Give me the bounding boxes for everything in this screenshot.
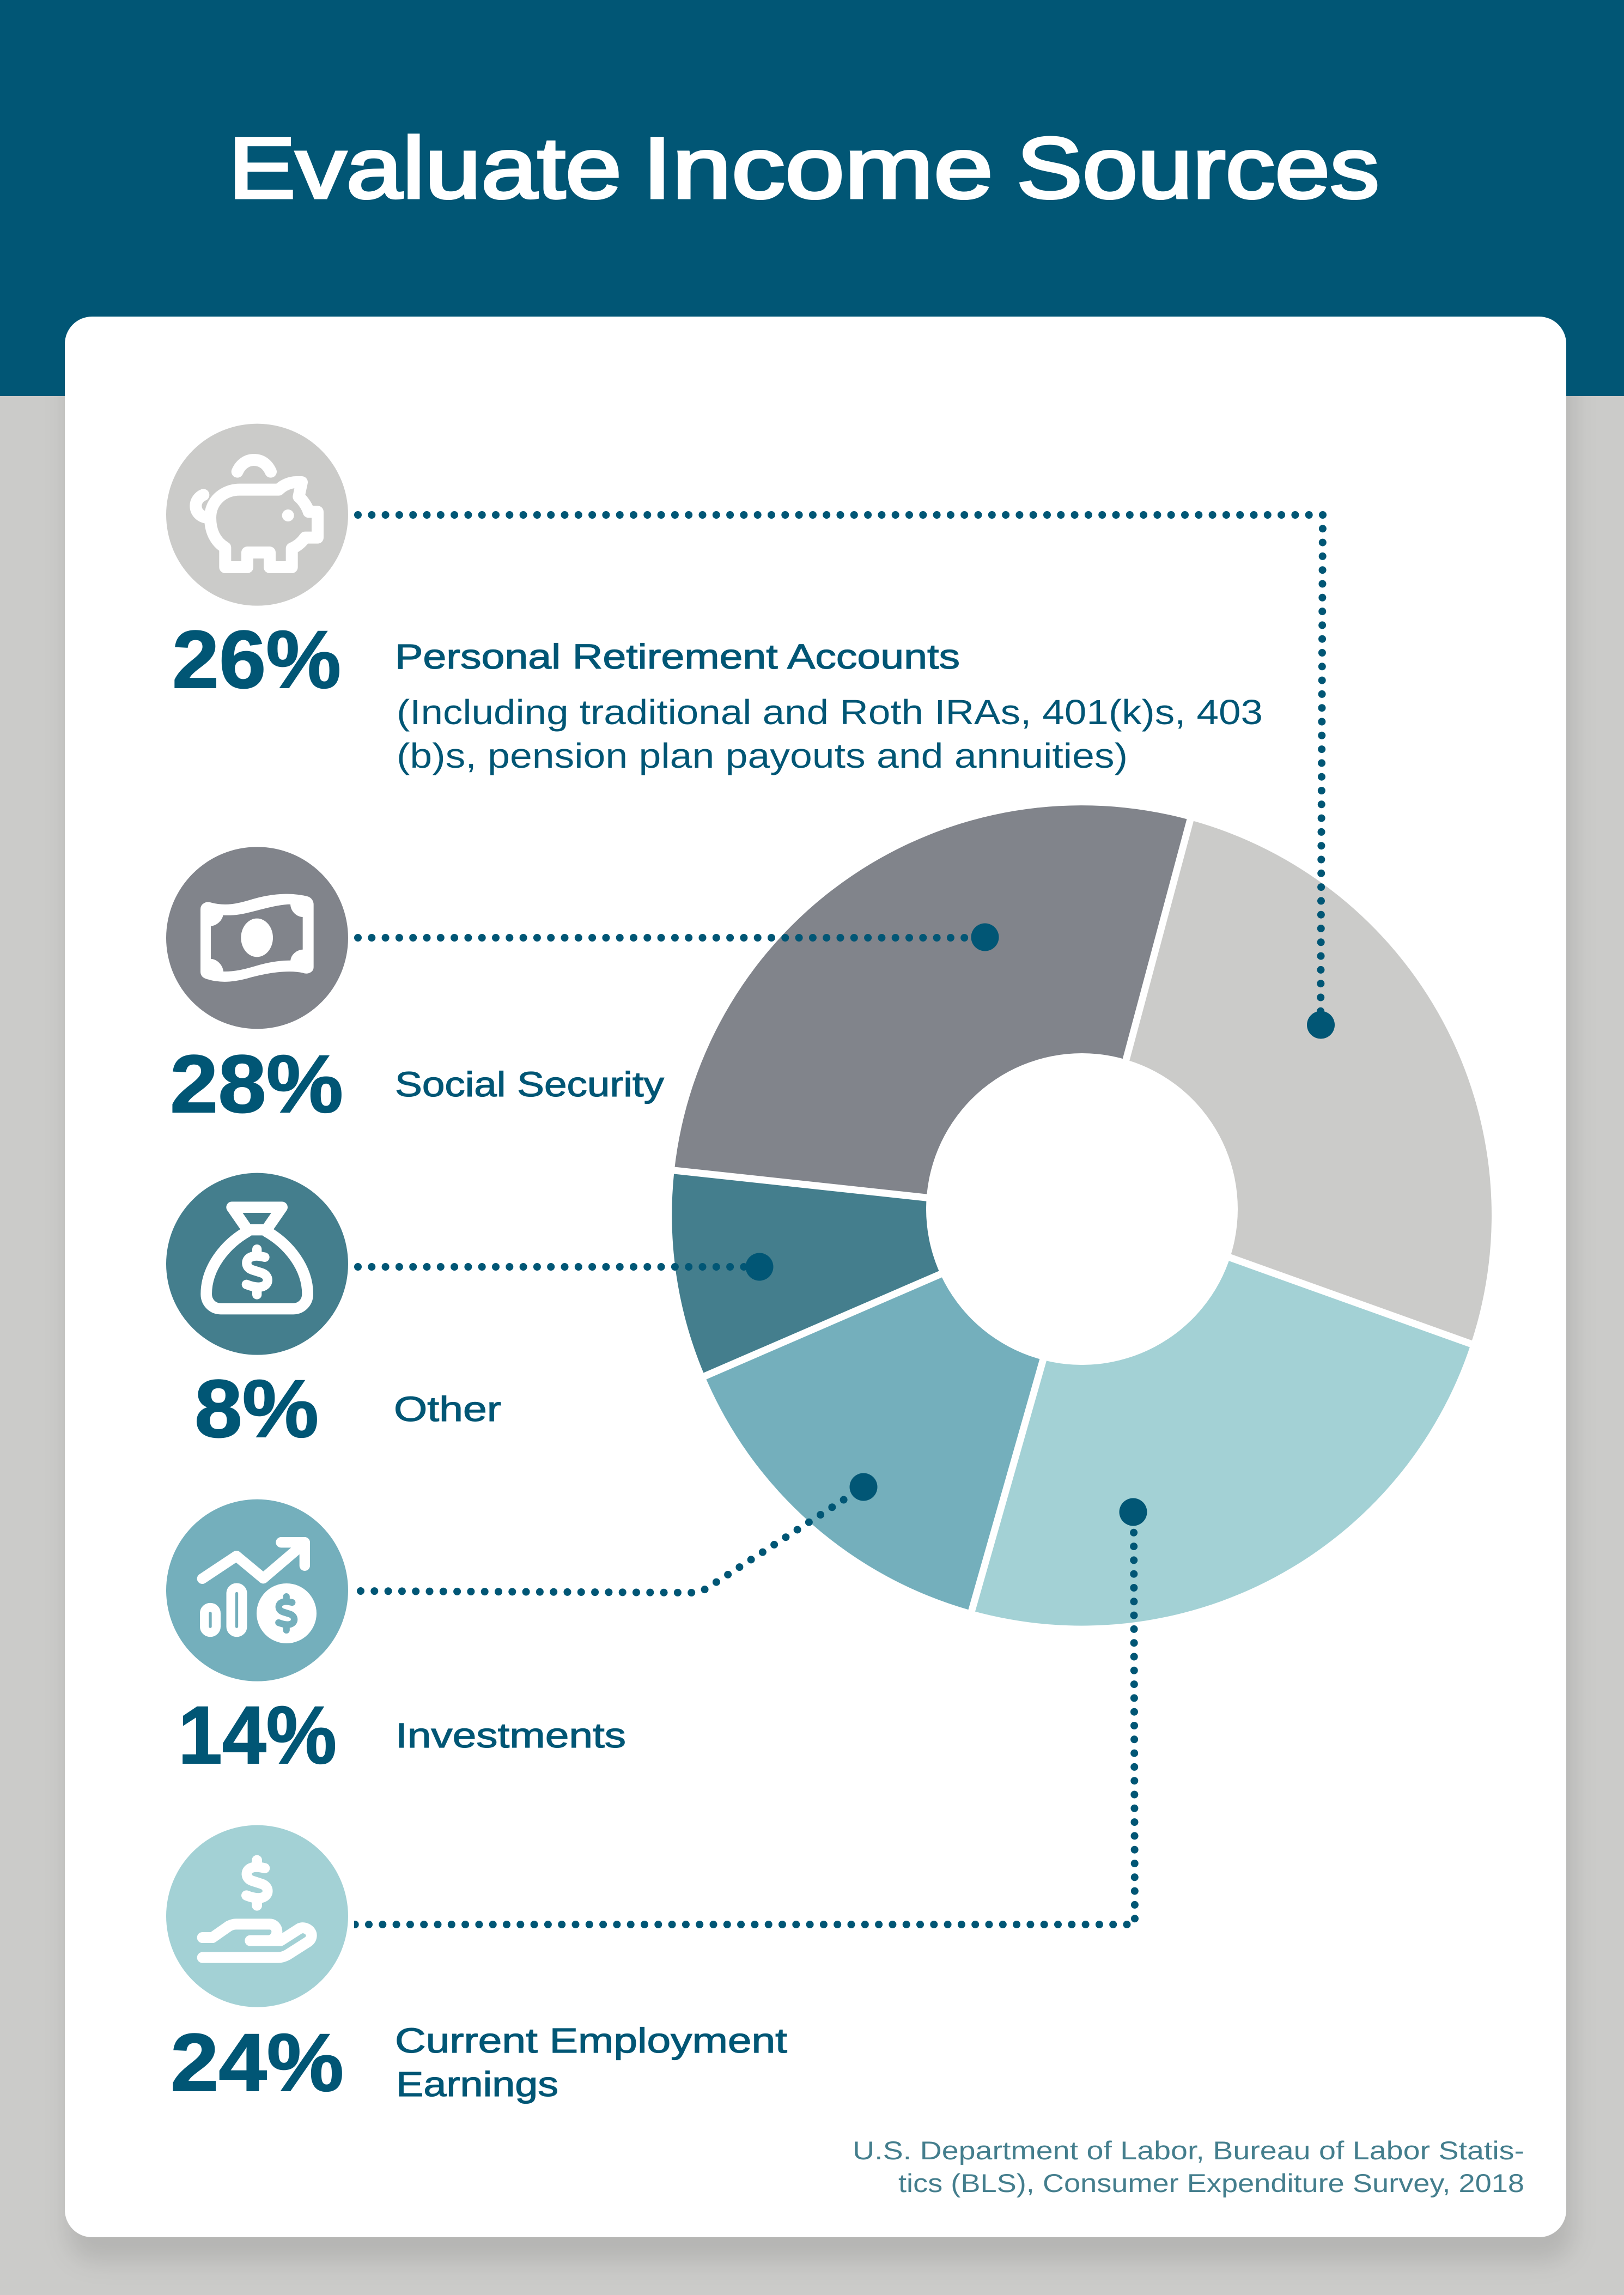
label: current employment earnings: Earnings [396, 2065, 558, 2104]
label: current employment earnings: Current Employment [395, 2021, 787, 2060]
stat: 8%: 8% [194, 1363, 319, 1454]
label: personal retirement accounts: Personal Retirement Accounts [395, 637, 960, 676]
source note: U.S. Department of Labor, Bureau of Labor Statis- [853, 2136, 1524, 2165]
title: Income [642, 119, 993, 216]
slice: current employment 24% [972, 1258, 1471, 1626]
connector: social security [358, 923, 999, 951]
icon: growth chart with coin [166, 1499, 348, 1681]
stat: 14%: 14% [178, 1689, 337, 1781]
header band [0, 0, 1624, 396]
stat: 24%: 24% [171, 2017, 344, 2108]
connector: personal retirement [358, 515, 1335, 1039]
slice: personal retirement 26% [1126, 820, 1492, 1344]
description: retirement accounts [397, 693, 1263, 775]
description: retirement accounts: (b)s, pension plan payouts and annuities) [397, 736, 1128, 775]
icon: piggy bank [166, 424, 348, 606]
description: retirement accounts: (Including traditional and Roth IRAs, 401(k)s, 403 [397, 693, 1263, 732]
connector: other [358, 1253, 774, 1280]
connector: current employment [355, 1498, 1147, 1924]
icon: money bag [166, 1173, 348, 1355]
title: Evaluate [228, 119, 622, 216]
label: investments: Investments [396, 1716, 626, 1755]
source note [853, 2136, 1524, 2197]
label: social security: Social Security [395, 1065, 664, 1104]
icon: banknote [166, 847, 348, 1029]
slice: investments 14% [705, 1274, 1043, 1611]
title [228, 119, 1379, 216]
slice: other 8% [672, 1170, 940, 1376]
icon: hand with dollar [166, 1825, 348, 2007]
stat: 26%: 26% [172, 614, 341, 705]
donut chart [666, 805, 1492, 1626]
panel: white card [65, 317, 1566, 2237]
title: Sources [1017, 119, 1379, 216]
slice: social security 28% [674, 805, 1190, 1198]
label: other: Other [394, 1389, 501, 1429]
source note: tics (BLS), Consumer Expenditure Survey, 2018 [898, 2169, 1524, 2197]
label: current employment earnings [395, 2021, 787, 2104]
connector: investments [361, 1473, 877, 1593]
stat: 28%: 28% [170, 1038, 343, 1130]
